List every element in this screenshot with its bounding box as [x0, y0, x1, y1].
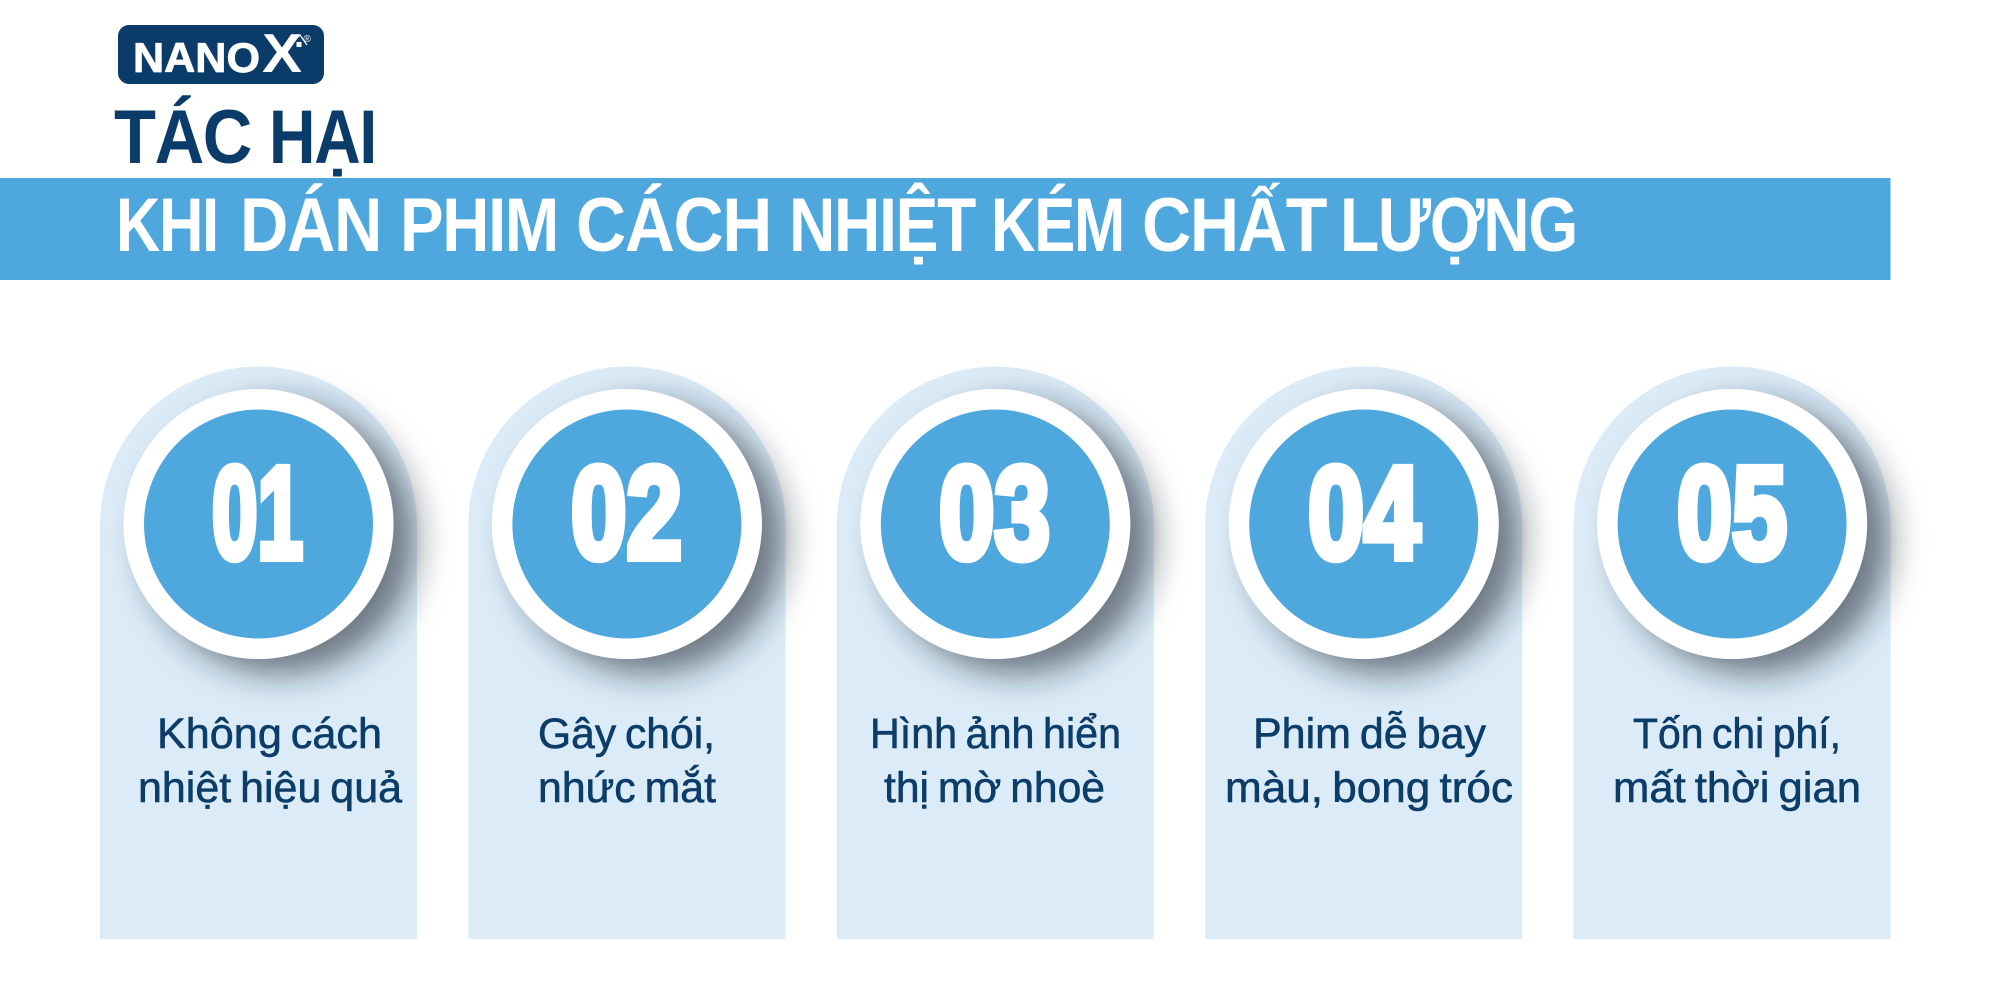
banner: NHIỆT [789, 182, 976, 268]
panel: item 01: nhiệt hiệu quả [138, 764, 402, 812]
banner: KÉM [991, 183, 1124, 268]
panel: item 05 [1574, 366, 1891, 939]
logo: NanoX [118, 22, 324, 84]
logo: NanoX: ® [304, 34, 312, 45]
panel: item 01: 01 [212, 439, 303, 586]
banner: CHẤT [1142, 183, 1327, 268]
panel: item 05: Tốn chi phí, [1633, 710, 1841, 758]
logo: NanoX: NANO [133, 34, 260, 81]
panel: item 02: 02 [571, 439, 682, 586]
panel: item 04 [1205, 366, 1522, 939]
banner: DÁN [240, 183, 381, 268]
banner [0, 178, 1890, 280]
banner: CÁCH [576, 183, 771, 268]
panel: item 02: nhức mắt [538, 764, 716, 812]
logo: NanoX: X [262, 22, 302, 84]
panel: item 02 [468, 366, 785, 939]
banner: KHI [116, 183, 218, 268]
panel: item 01: Không cách [157, 710, 382, 758]
panel: item 05: 05 [1677, 439, 1787, 586]
panel: item 04: Phim dễ bay [1253, 710, 1486, 758]
panel: item 03: Hình ảnh hiển [870, 710, 1121, 758]
panel: item 01 [100, 366, 417, 939]
banner: PHIM [400, 183, 558, 268]
panel: item 04: màu, bong tróc [1225, 764, 1513, 812]
panel: item 03: 03 [939, 439, 1050, 586]
panel: item 03: thị mờ nhoè [884, 764, 1105, 812]
title: TÁC HẠI: TÁC [114, 95, 251, 180]
panel: item 05: mất thời gian [1613, 764, 1861, 812]
title: TÁC HẠI [114, 95, 376, 180]
banner: LƯỢNG [1340, 183, 1577, 268]
panel: item 02: Gây chói, [538, 710, 715, 758]
title: TÁC HẠI: HẠI [269, 95, 376, 180]
panel: item 03 [837, 366, 1154, 939]
panel: item 04: 04 [1308, 439, 1420, 586]
